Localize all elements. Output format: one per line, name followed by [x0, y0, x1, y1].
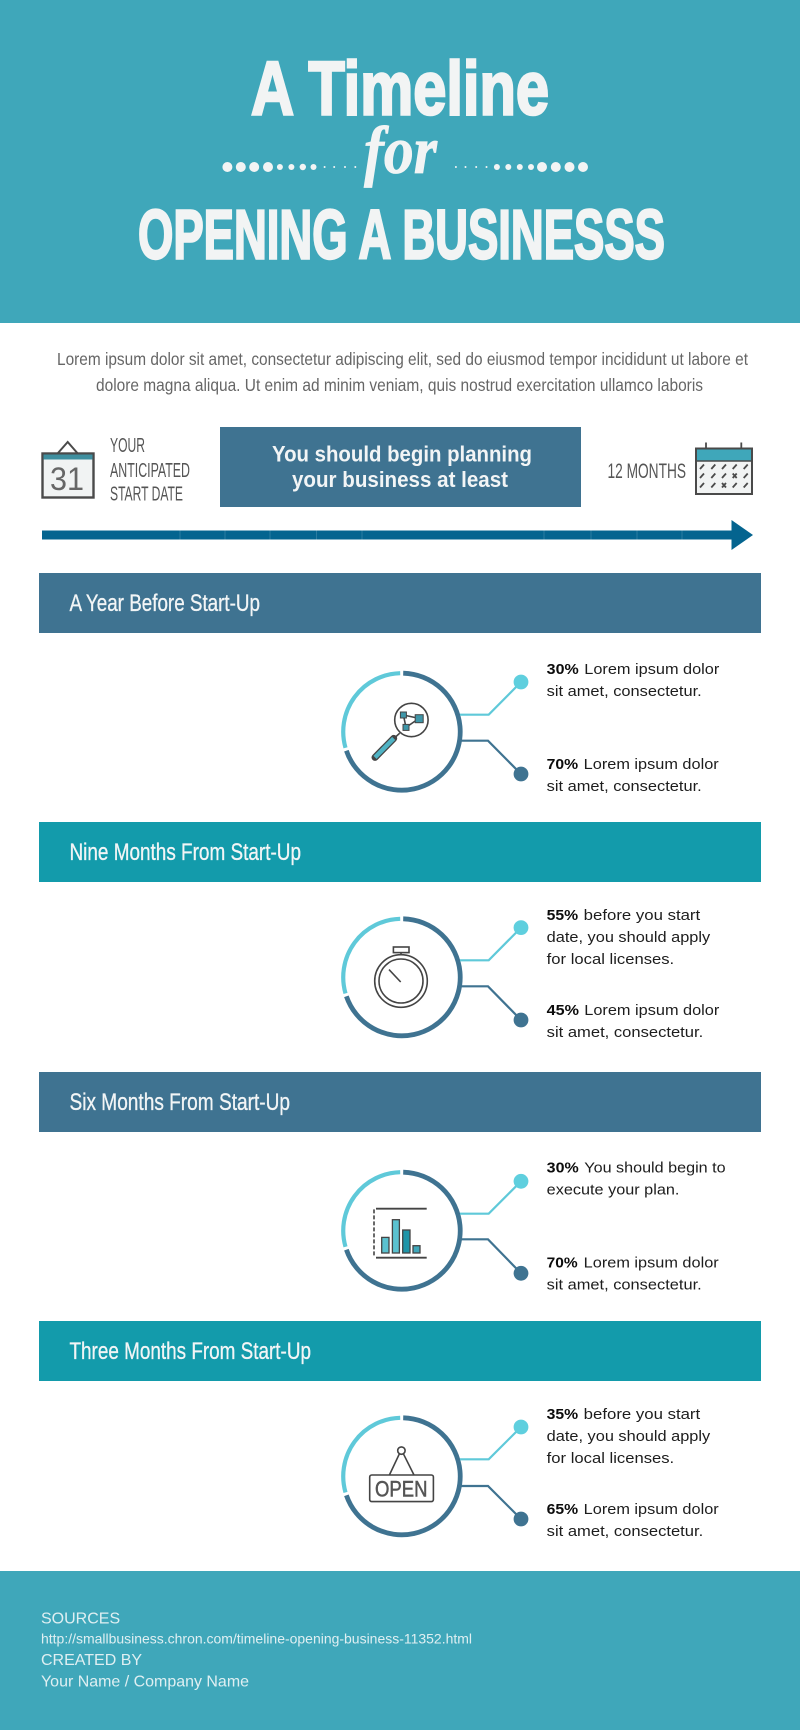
- note: 70%: sit amet, consectetur.: [547, 1277, 702, 1294]
- icon: hanging date calendar: 31: [50, 461, 84, 497]
- dotted divider right: [455, 162, 588, 172]
- sources: SOURCES: [41, 1610, 120, 1627]
- donut with open sign icon: OPEN: [375, 1477, 428, 1502]
- intro text: [57, 349, 748, 395]
- created by: [41, 1652, 249, 1691]
- note: 30%: 30%: [547, 1160, 579, 1177]
- header panel: [0, 0, 800, 323]
- label: your anticipated start date: YOUR: [110, 435, 145, 457]
- note: 45%: Lorem ipsum dolor: [584, 1002, 719, 1019]
- note: 70%: [547, 1255, 719, 1294]
- connector: dark: [460, 986, 528, 1027]
- planning callout box: [220, 427, 581, 507]
- planning callout box: You should begin planning: [272, 442, 532, 466]
- step 2: donut, connectors and notes: [343, 907, 719, 1041]
- sources: http://smallbusiness.chron.com/timeline-opening-business-11352.html: [41, 1631, 472, 1647]
- section heading: three months from start-up: [39, 1321, 761, 1381]
- intro text: dolore magna aliqua. Ut enim ad minim veniam, quis nostrud exercitation ullamco laboris: [96, 375, 703, 395]
- connector: dark: [460, 1486, 528, 1526]
- note: 30%: sit amet, consectetur.: [547, 683, 702, 700]
- connector: light: [460, 920, 528, 960]
- donut with stopwatch icon: [343, 919, 460, 1036]
- section heading: a year before start-up: [39, 573, 761, 633]
- note: 65%: 65%: [547, 1501, 578, 1518]
- note: 35%: [547, 1406, 711, 1467]
- label: 12 months: 12 MONTHS: [608, 460, 686, 483]
- note: 70%: Lorem ipsum dolor: [584, 1255, 719, 1272]
- note: 70%: 70%: [547, 756, 578, 773]
- connector: light: [460, 1420, 528, 1459]
- label: your anticipated start date: ANTICIPATED: [110, 460, 190, 482]
- note: 45%: sit amet, consectetur.: [547, 1024, 703, 1041]
- note: 65%: Lorem ipsum dolor: [584, 1501, 719, 1518]
- donut with open sign icon: [343, 1418, 460, 1535]
- created by: CREATED BY: [41, 1652, 142, 1669]
- section heading: nine months from start-up: [39, 822, 761, 882]
- note: 30%: Lorem ipsum dolor: [584, 661, 719, 678]
- step 1: donut, connectors and notes: [343, 661, 719, 795]
- section heading: nine months from start-up: Nine Months From Start-Up: [70, 839, 301, 866]
- label: your anticipated start date: [110, 435, 190, 506]
- section heading: three months from start-up: Three Months From Start-Up: [70, 1338, 311, 1365]
- section heading: a year before start-up: A Year Before Start-Up: [70, 590, 260, 617]
- connector: dark: [460, 1239, 528, 1281]
- created by: Your Name / Company Name: [41, 1674, 249, 1691]
- planning callout box: your business at least: [292, 467, 508, 492]
- note: 30%: [547, 661, 719, 700]
- section heading: six months from start-up: Six Months From Start-Up: [70, 1089, 290, 1116]
- note: 70%: [547, 756, 719, 795]
- step 4: donut, connectors and notes: [343, 1406, 719, 1540]
- note: 55%: for local licenses.: [547, 951, 674, 968]
- section heading: six months from start-up: [39, 1072, 761, 1132]
- note: 35%: for local licenses.: [547, 1450, 674, 1467]
- title word: for: for: [364, 112, 437, 188]
- donut with magnifier icon: [343, 673, 460, 790]
- note: 30%: [547, 1160, 726, 1199]
- note: 55%: 55%: [547, 907, 578, 924]
- note: 30%: You should begin to: [584, 1160, 726, 1177]
- note: 35%: before you start: [584, 1406, 701, 1423]
- dotted divider left: [222, 162, 356, 172]
- note: 70%: sit amet, consectetur.: [547, 778, 702, 795]
- connector: light: [460, 1174, 528, 1214]
- note: 70%: 70%: [547, 1255, 578, 1272]
- connector: light: [460, 675, 528, 715]
- icon: month calendar: [696, 442, 752, 494]
- note: 35%: 35%: [547, 1406, 578, 1423]
- title line: A Timeline: A Timeline: [251, 46, 549, 132]
- timeline arrow: [42, 520, 753, 550]
- note: 55%: before you start: [584, 907, 701, 924]
- sources: [41, 1610, 472, 1647]
- connector: dark: [460, 741, 528, 781]
- footer panel: [0, 1571, 800, 1730]
- note: 45%: [547, 1002, 719, 1041]
- note: 70%: Lorem ipsum dolor: [584, 756, 719, 773]
- donut with bar chart icon: [343, 1172, 460, 1289]
- step 3: donut, connectors and notes: [343, 1160, 726, 1294]
- note: 55%: [547, 907, 711, 968]
- note: 65%: sit amet, consectetur.: [547, 1523, 703, 1540]
- note: 65%: [547, 1501, 719, 1540]
- note: 30%: 30%: [547, 661, 579, 678]
- note: 30%: execute your plan.: [547, 1182, 679, 1199]
- note: 35%: date, you should apply: [547, 1428, 711, 1445]
- note: 55%: date, you should apply: [547, 929, 711, 946]
- note: 45%: 45%: [547, 1002, 579, 1019]
- label: your anticipated start date: START DATE: [110, 484, 183, 506]
- icon: hanging date calendar: [42, 442, 94, 498]
